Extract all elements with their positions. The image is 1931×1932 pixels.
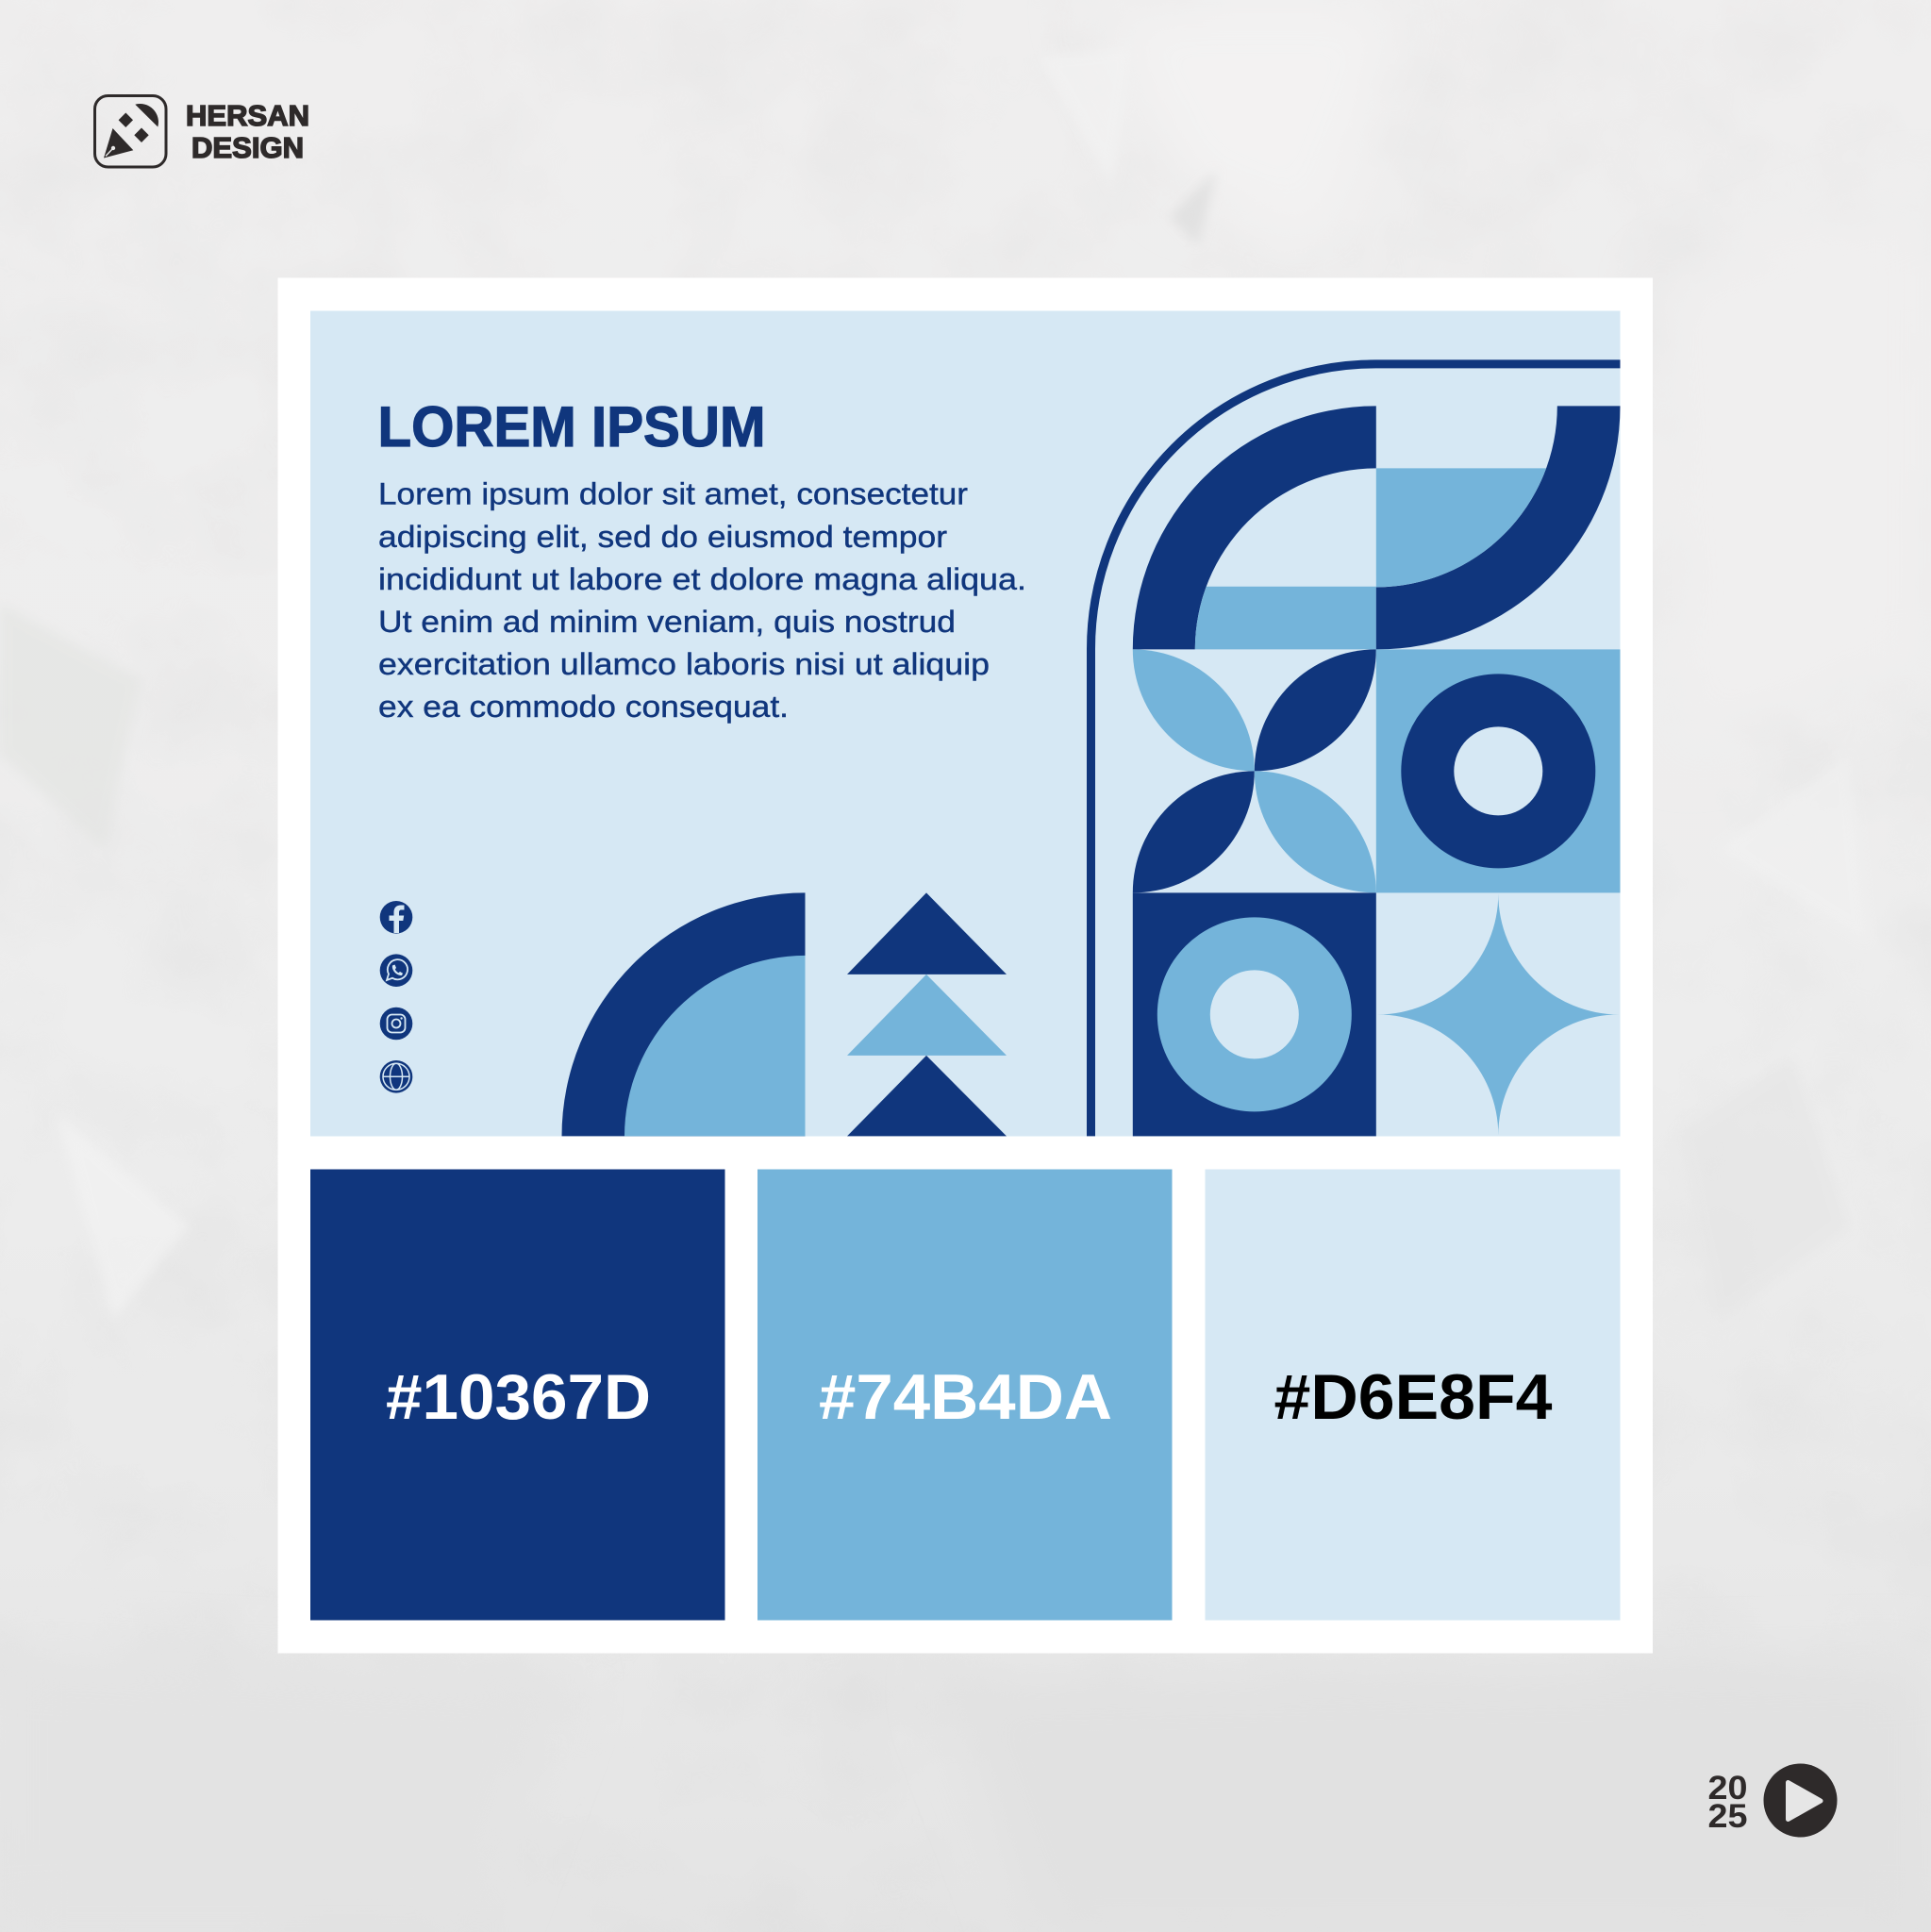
- text block: body copy: [378, 477, 1026, 724]
- year text: 25: [1707, 1798, 1747, 1835]
- quarter ring shape: [562, 892, 806, 1136]
- swatch: dark blue: [310, 1170, 724, 1621]
- year text: [1707, 1770, 1747, 1835]
- year text: 20: [1707, 1770, 1747, 1807]
- tile: navy arc with blue fill: [1376, 406, 1621, 649]
- tile: four petals: [1133, 649, 1376, 892]
- swatch: light blue: #D6E8F4: [1273, 1361, 1553, 1433]
- tile: navy arc with light band: [1133, 406, 1376, 649]
- title: LOREM IPSUM: [377, 395, 766, 458]
- text block: body copy: ex ea commodo consequat.: [378, 690, 789, 724]
- logo wordmark: DESIGN: [191, 131, 304, 164]
- tile: navy square with blue ring: [1133, 892, 1376, 1136]
- swatch: mid blue: #74B4DA: [819, 1361, 1112, 1433]
- icons: social links: [380, 901, 412, 1093]
- icon: play: [1764, 1764, 1838, 1838]
- frame line: curved outline: [1090, 364, 1621, 1136]
- stacked triangles: [847, 892, 1007, 1136]
- logo wordmark: HERSAN: [186, 99, 309, 132]
- tile: blue square with navy ring: [1376, 649, 1621, 892]
- panel: white card: [277, 277, 1653, 1653]
- text block: body copy: incididunt ut labore et dolore magna aliqua.: [378, 562, 1026, 596]
- icon: pen nib in rounded square: [94, 96, 166, 167]
- tile: four-point star: [1377, 893, 1619, 1135]
- icon: facebook: [380, 901, 412, 934]
- icon: instagram: [380, 1008, 412, 1040]
- year badge: 2025 with play icon: [1707, 1764, 1838, 1838]
- swatch: mid blue: [757, 1170, 1172, 1621]
- panel: hero light blue: [310, 311, 1621, 1136]
- icon: whatsapp: [380, 954, 412, 987]
- icon: globe: [380, 1060, 412, 1093]
- logo: Hersan Design: [94, 96, 309, 167]
- text block: body copy: adipiscing elit, sed do eiusmod tempor: [378, 520, 947, 554]
- text block: body copy: Lorem ipsum dolor sit amet, consectetur: [378, 477, 968, 511]
- swatch: light blue: [1206, 1170, 1621, 1621]
- logo wordmark: [186, 99, 309, 164]
- text block: body copy: Ut enim ad minim veniam, quis nostrud: [378, 605, 956, 639]
- text block: body copy: exercitation ullamco laboris nisi ut aliquip: [378, 647, 990, 681]
- swatch: dark blue: #10367D: [386, 1361, 651, 1433]
